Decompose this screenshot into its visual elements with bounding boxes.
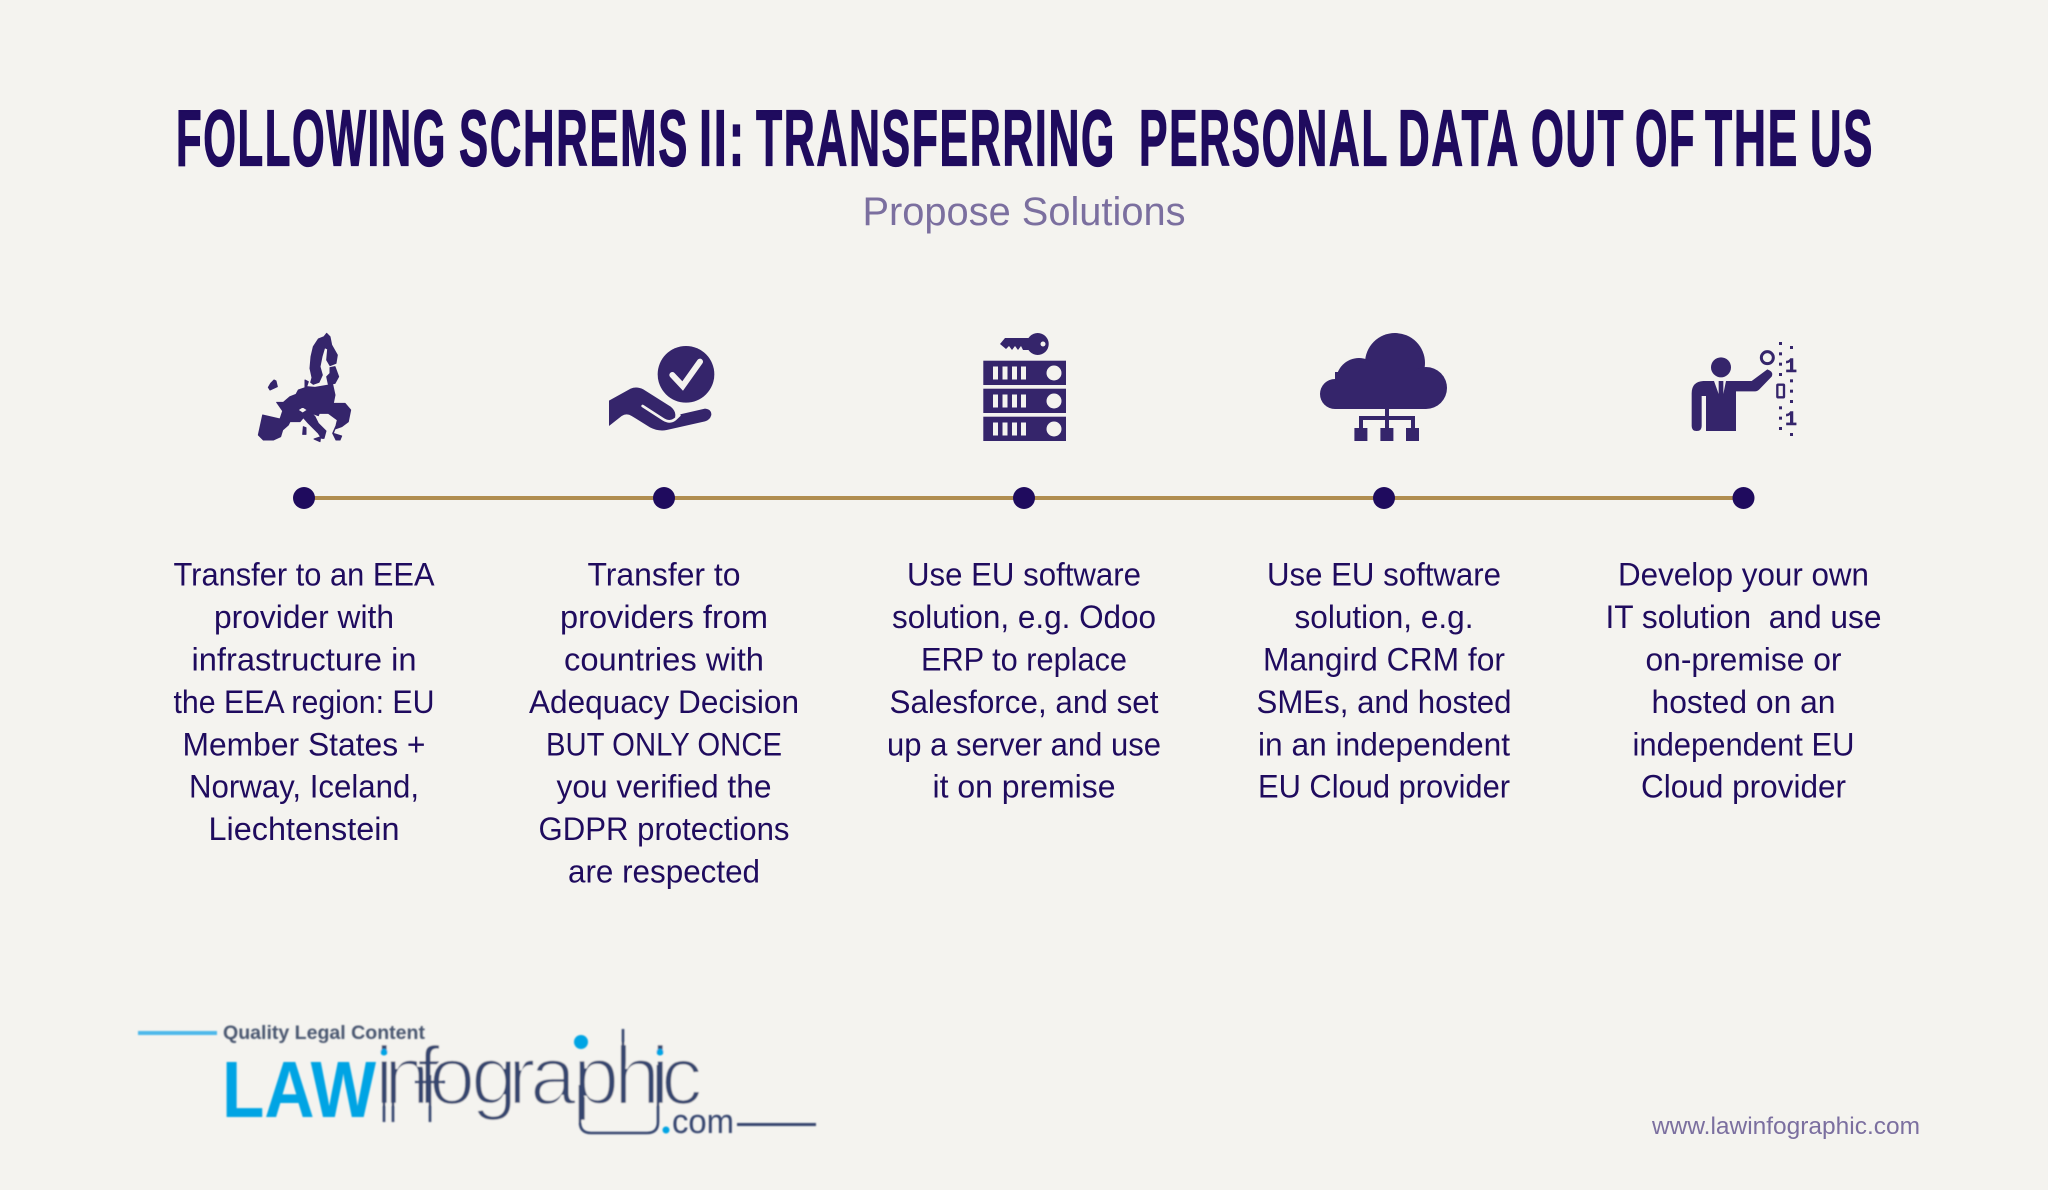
subtitle: Propose Solutions [862,190,1186,234]
step 4 text: EU Cloud provider [1258,768,1510,804]
panel: step 4 EU cloud CRM [1256,333,1512,804]
icon: person with binary data [1692,342,1797,436]
step 2 text: providers from [560,599,768,635]
icon: cloud network [1320,333,1447,441]
website url: www.lawinfographic.com [1651,1113,1920,1140]
step 5 text: Develop your own [1618,556,1869,592]
step 4 text: Use EU software [1267,556,1501,592]
step 1 text [174,556,435,847]
logo: Law Infographic: LAW [222,1045,376,1134]
title: TRANSFERRING [756,94,1116,182]
icon: server with key [983,333,1066,441]
panel: step 5 own IT solution [1606,342,1882,804]
timeline line [304,496,1744,500]
step 2 text: BUT ONLY ONCE [546,726,782,762]
step 5 text: independent EU [1632,726,1854,762]
step 5 text [1606,556,1882,804]
step 5 text: Cloud provider [1641,768,1846,804]
step 4 text: SMEs, and hosted [1256,684,1512,720]
timeline dot 5 [1732,487,1754,509]
step 2 text: countries with [564,642,764,678]
step 3 text [887,556,1161,804]
title: DATA [1398,94,1520,182]
icon: EU map [258,333,351,442]
icon: person with binary data: 1 [1785,356,1797,379]
logo: Law Infographic [138,1023,816,1141]
step 4 text: solution, e.g. [1294,599,1474,635]
title: PERSONAL [1139,94,1389,182]
timeline dot 3 [1013,487,1035,509]
step 1 text: provider with [214,599,394,635]
title: SCHREMS [459,94,689,182]
step 3 text: Salesforce, and set [890,684,1159,720]
step 4 text: in an independent [1258,726,1510,762]
step 1 text: Liechtenstein [208,811,400,847]
timeline dot 1 [293,487,315,509]
step 1 text: Member States + [182,726,426,762]
step 1 text: the EEA region: EU [174,684,434,720]
step 2 text: you verified the [556,768,772,804]
title: FOLLOWING [176,94,447,182]
step 2 text: Transfer to [588,556,740,592]
step 3 text: solution, e.g. Odoo [892,599,1156,635]
step 2 text [529,556,799,890]
step 1 text: infrastructure in [192,642,416,678]
step 4 text [1256,556,1512,804]
title: OUT [1531,94,1625,182]
step 1 text: Transfer to an EEA [174,556,435,592]
title [176,94,1874,182]
step 2 text: are respected [568,854,760,890]
step 5 text: on-premise or [1646,642,1842,678]
panel: step 1 EEA provider [174,333,435,847]
step 5 text: IT solution and use [1606,599,1882,635]
icon: person with binary data: 1 [1785,409,1797,432]
step 2 text: GDPR protections [538,811,790,847]
title: THE [1705,94,1799,182]
step 2 text: Adequacy Decision [529,684,799,720]
title: OF [1635,94,1696,182]
step 3 text: it on premise [932,768,1116,804]
title: II: [699,94,746,182]
step 4 text: Mangird CRM for [1263,642,1505,678]
title: US [1810,94,1874,182]
step 5 text: hosted on an [1652,684,1836,720]
icon: hand holding check [609,346,714,430]
step 3 text: up a server and use [887,726,1161,762]
logo: Law Infographic: Quality Legal Content [223,1023,426,1044]
step 3 text: ERP to replace [921,642,1127,678]
step 3 text: Use EU software [907,556,1141,592]
step 1 text: Norway, Iceland, [189,768,419,804]
logo: Law Infographic: com [672,1103,734,1141]
logo: Law Infographic: infographic [375,1029,702,1122]
panel: step 3 EU software on premise [887,333,1161,804]
panel: step 2 adequacy decision [529,346,799,890]
timeline dot 2 [653,487,675,509]
timeline dot 4 [1373,487,1395,509]
